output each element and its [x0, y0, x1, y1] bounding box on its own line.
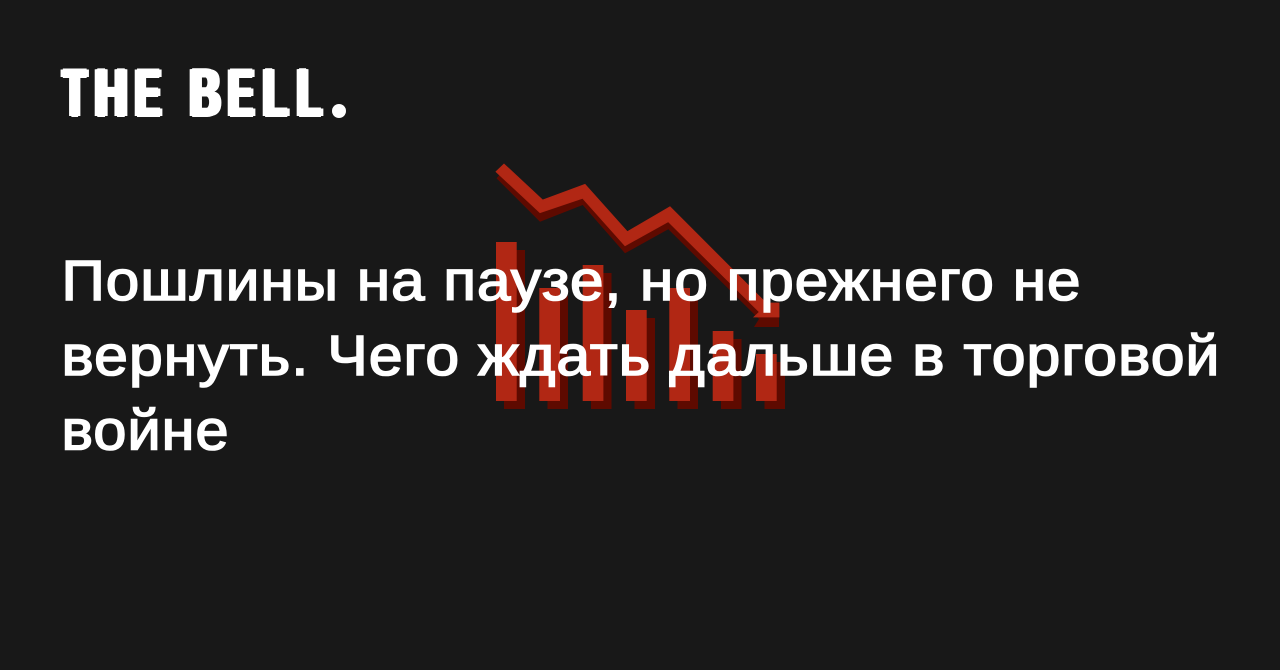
- bars: [496, 242, 777, 401]
- headline: Пошлины на паузе, но прежнего не: [62, 249, 1082, 313]
- falling arrow: [496, 164, 779, 317]
- chart icon: falling bars with arrow: [496, 164, 785, 409]
- headline: вернуть. Чего ждать дальше в торговой: [62, 324, 1220, 388]
- logo: THE BELL.: E: [135, 55, 161, 131]
- logo: THE BELL.: L: [263, 55, 288, 131]
- headline: [62, 249, 1220, 462]
- logo: THE BELL.: L: [297, 55, 322, 131]
- arrow shadow: [496, 171, 779, 327]
- logo: THE BELL.: B: [190, 55, 220, 131]
- bar shadows: [504, 250, 785, 409]
- logo: THE BELL.: H: [95, 55, 127, 131]
- headline: войне: [62, 398, 230, 462]
- logo: THE BELL.: [60, 55, 346, 131]
- logo: THE BELL.: E: [228, 55, 254, 131]
- logo: THE BELL.: T: [63, 55, 87, 131]
